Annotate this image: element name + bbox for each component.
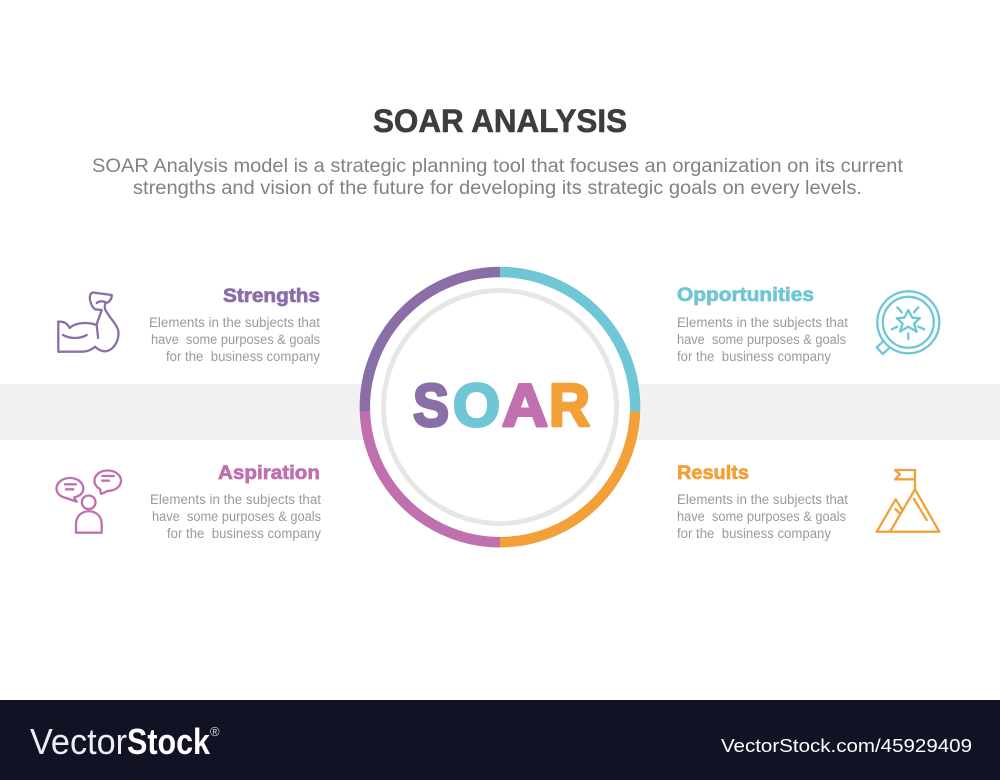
text: results description: Elements in the subjects that — [677, 492, 848, 507]
footer url: VectorStock.com/45929409 — [721, 735, 972, 756]
text: aspiration description: Elements in the subjects that — [150, 492, 321, 507]
background band — [0, 384, 1000, 440]
center word SOAR — [413, 372, 590, 439]
intro paragraph — [92, 156, 904, 199]
footer bar — [0, 700, 1000, 780]
text: results description: for the business company — [677, 526, 831, 541]
icon: flexed arm — [58, 292, 118, 352]
text: opportunities description: Elements in the subjects that — [677, 315, 848, 330]
ring segment: opportunities — [500, 272, 635, 412]
panel: results — [677, 463, 939, 541]
text: strengths description: Elements in the subjects that — [149, 315, 320, 330]
center word SOAR: A — [502, 372, 548, 439]
ring segment: aspiration — [365, 412, 500, 542]
ring segment: strengths — [365, 272, 500, 412]
text: results description: have some purposes & goals — [677, 509, 846, 524]
ring segment: results — [500, 412, 635, 542]
heading: opportunities: Opportunities — [677, 285, 814, 306]
text: aspiration description: for the business company — [167, 526, 321, 541]
intro paragraph: strengths and vision of the future for developing its strategic goals on every levels. — [133, 178, 862, 199]
title: SOAR ANALYSIS — [373, 103, 627, 139]
heading: aspiration: Aspiration — [218, 463, 320, 484]
text: aspiration description — [150, 492, 321, 541]
text: opportunities description: for the business company — [677, 349, 831, 364]
text: strengths description — [149, 315, 320, 364]
center word SOAR: S — [413, 372, 449, 439]
text: aspiration description: have some purposes & goals — [152, 509, 321, 524]
center word SOAR: R — [549, 372, 590, 439]
footer logo: ® — [210, 724, 220, 739]
footer logo: Vector — [30, 721, 127, 762]
central SOAR ring — [359, 266, 641, 548]
text: results description — [677, 492, 848, 541]
heading: results: Results — [677, 463, 749, 484]
icon: person with speech bubbles — [56, 470, 121, 533]
text: opportunities description: have some purposes & goals — [677, 332, 846, 347]
text: strengths description: for the business company — [166, 349, 320, 364]
icon: mountain with flag — [877, 470, 939, 532]
heading: strengths: Strengths — [223, 286, 320, 307]
intro paragraph: SOAR Analysis model is a strategic planning tool that focuses an organization on its current — [92, 156, 904, 177]
panel: aspiration — [56, 463, 321, 541]
panel: strengths — [58, 286, 320, 364]
text: strengths description: have some purposes & goals — [151, 332, 320, 347]
footer logo: Stock — [127, 721, 211, 762]
icon: star badge — [877, 291, 939, 354]
center word SOAR: O — [453, 372, 500, 439]
panel: opportunities — [677, 285, 939, 364]
inner grey ring — [384, 290, 616, 524]
text: opportunities description — [677, 315, 848, 364]
footer logo — [30, 721, 220, 762]
